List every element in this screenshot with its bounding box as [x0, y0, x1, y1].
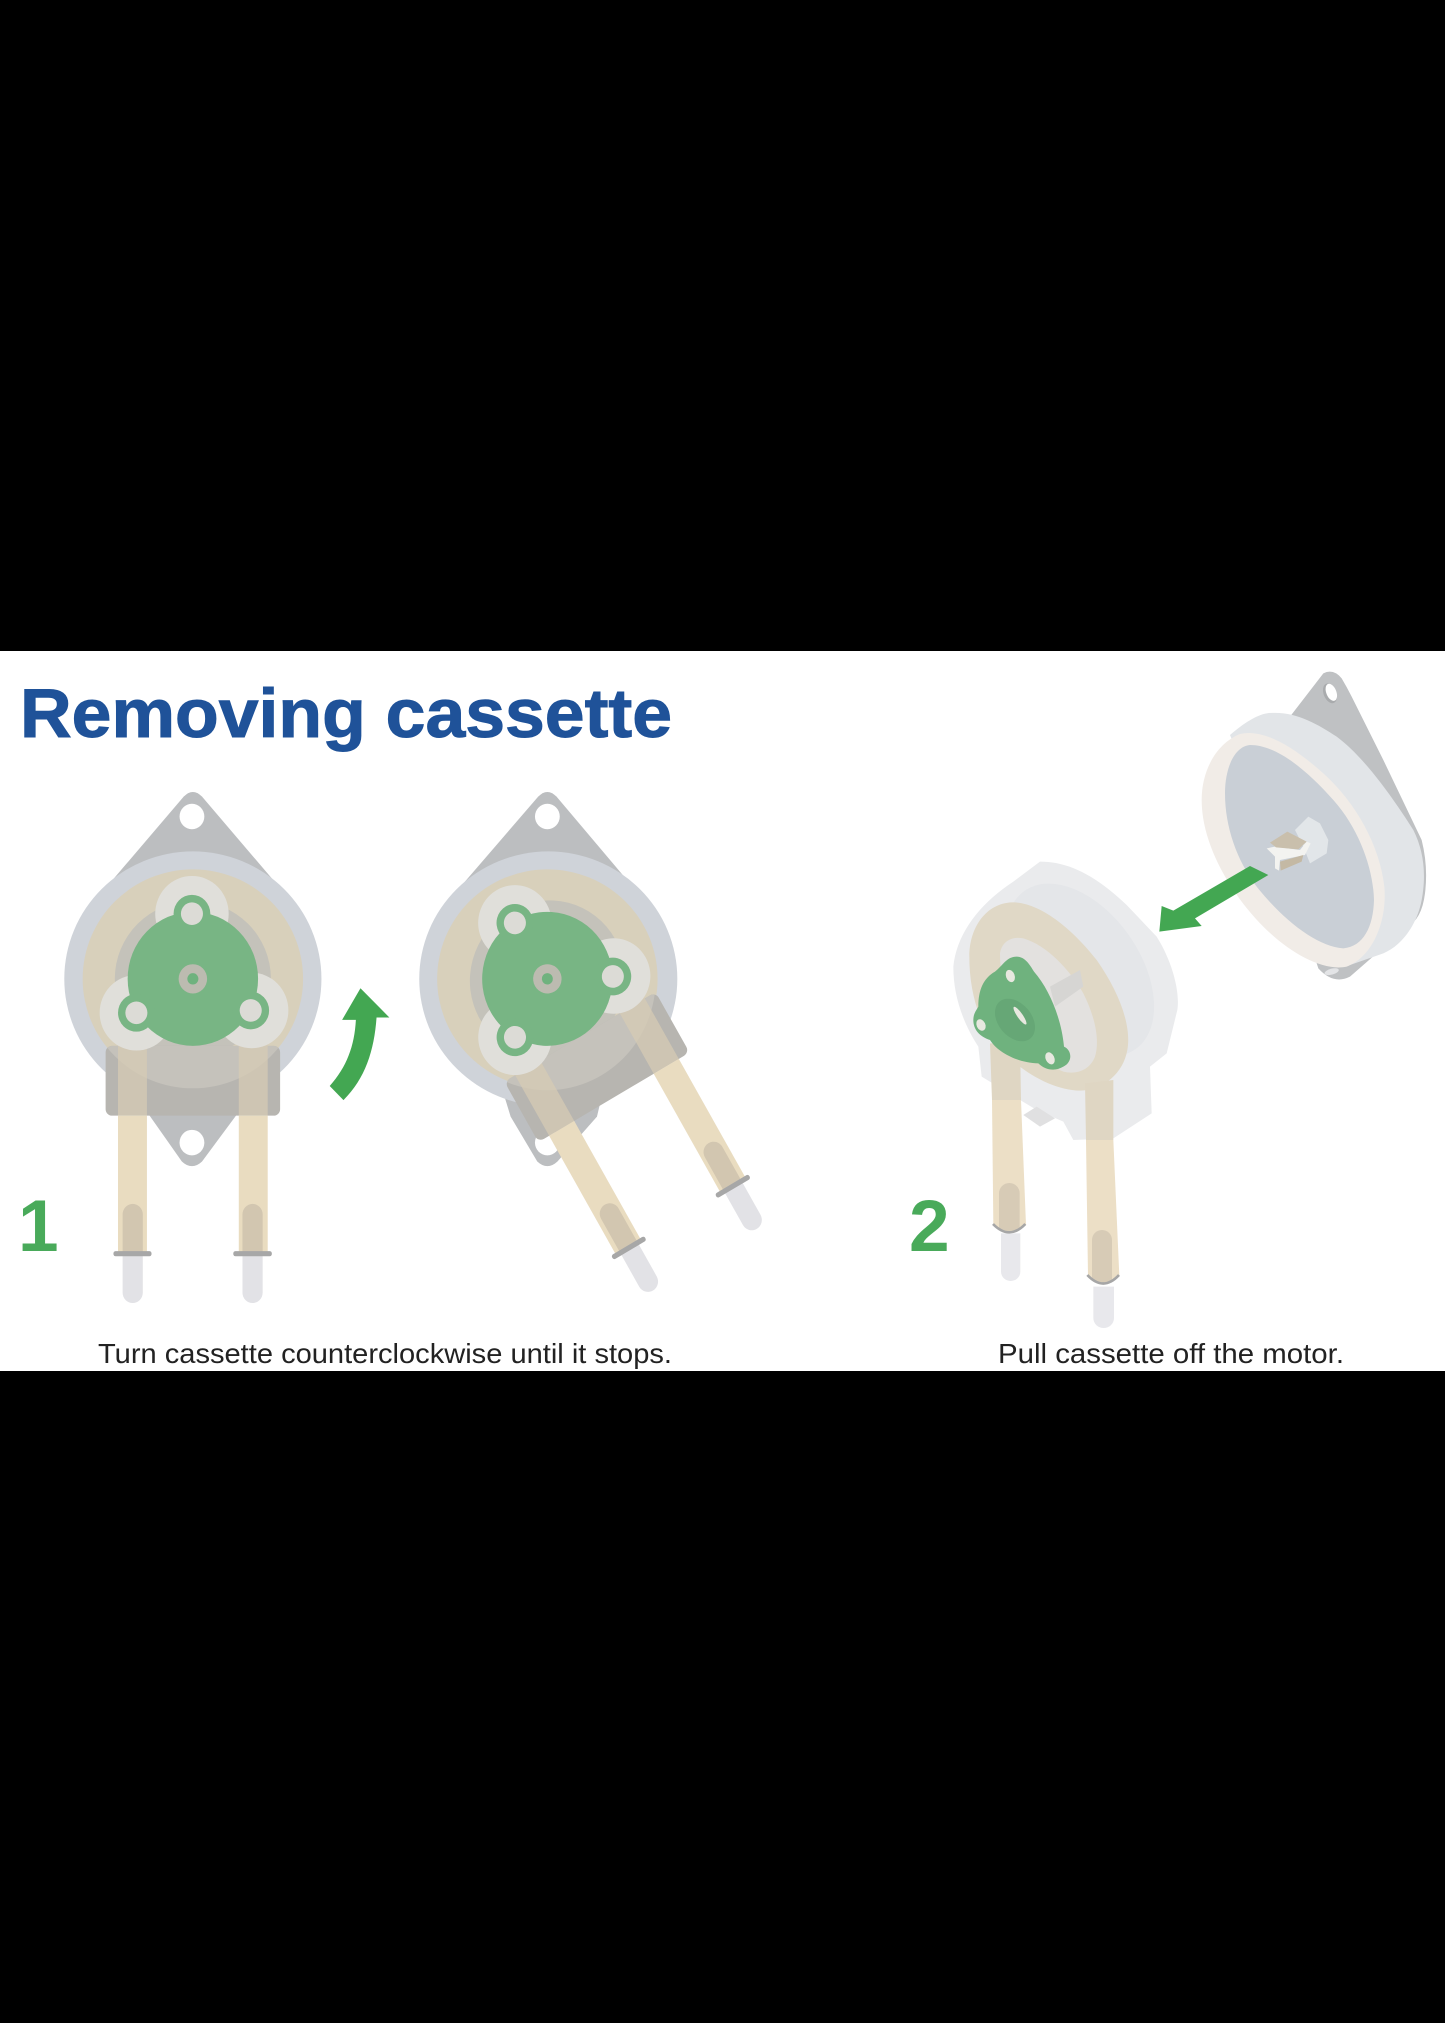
pump before rotation	[64, 792, 321, 1303]
rotated cassette	[470, 885, 762, 1292]
tubes	[990, 1043, 1119, 1328]
pump after rotation	[419, 792, 762, 1292]
pull arrow	[1159, 866, 1268, 932]
rotation arrow	[330, 988, 389, 1100]
rotating cassette	[100, 876, 288, 1303]
step number 2: 2	[909, 1186, 950, 1267]
step 1 illustration	[64, 792, 799, 1315]
caption step 1: Turn cassette counterclockwise until it stops.	[98, 1338, 672, 1369]
green hub	[973, 957, 1070, 1070]
motor	[1202, 672, 1426, 979]
step number 1: 1	[18, 1186, 59, 1267]
caption step 2: Pull cassette off the motor.	[998, 1338, 1344, 1369]
cassette pulled off	[953, 856, 1185, 1328]
title: Removing cassette	[20, 675, 672, 752]
